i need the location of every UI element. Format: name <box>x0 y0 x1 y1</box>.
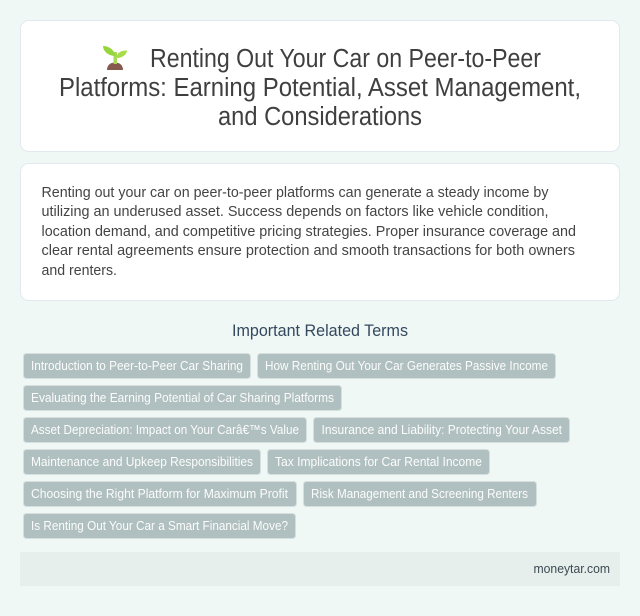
summary text: Renting out your car on peer-to-peer platforms can generate a steady income by <box>42 185 549 201</box>
panel: summary <box>20 164 620 300</box>
tag <box>24 418 306 442</box>
tag: Introduction to Peer-to-Peer Car Sharing <box>31 358 243 373</box>
tag: How Renting Out Your Car Generates Passive Income <box>265 358 548 373</box>
tag <box>304 482 536 506</box>
icon: seedling <box>103 46 127 70</box>
summary text: clear rental agreements ensure protection and smooth transactions for both owners <box>42 243 575 259</box>
summary text: location demand, and competitive pricing strategies. Proper insurance coverage and <box>42 224 576 240</box>
tag <box>258 354 556 378</box>
title text: Platforms: Earning Potential, Asset Management, <box>59 74 581 102</box>
heading: related terms: Important Related Terms <box>232 322 408 340</box>
summary text <box>42 185 576 279</box>
footer: moneytar.com <box>534 562 610 576</box>
panel: title <box>20 20 620 152</box>
summary text: and renters. <box>42 263 117 279</box>
tag: Insurance and Liability: Protecting Your Asset <box>322 422 562 437</box>
footer <box>20 552 620 586</box>
tag: Choosing the Right Platform for Maximum Profit <box>31 486 288 501</box>
summary text: utilizing an underused asset. Success depends on factors like vehicle condition, <box>42 204 548 220</box>
tag: Asset Depreciation: Impact on Your Carâ€™s Value <box>31 422 299 437</box>
tag <box>24 386 342 410</box>
tag list <box>24 354 570 538</box>
title text: Renting Out Your Car on Peer-to-Peer <box>150 45 541 73</box>
tag <box>268 450 490 474</box>
tag <box>24 450 260 474</box>
tag <box>24 514 296 538</box>
tag <box>314 418 570 442</box>
tag: Risk Management and Screening Renters <box>311 486 528 501</box>
tag: Tax Implications for Car Rental Income <box>275 454 482 469</box>
tag: Is Renting Out Your Car a Smart Financial Move? <box>31 518 288 533</box>
tag <box>24 482 296 506</box>
tag: Maintenance and Upkeep Responsibilities <box>31 454 253 469</box>
tag: Evaluating the Earning Potential of Car Sharing Platforms <box>31 390 334 405</box>
title text: and Considerations <box>218 103 422 131</box>
title text <box>59 45 581 131</box>
tag <box>24 354 250 378</box>
